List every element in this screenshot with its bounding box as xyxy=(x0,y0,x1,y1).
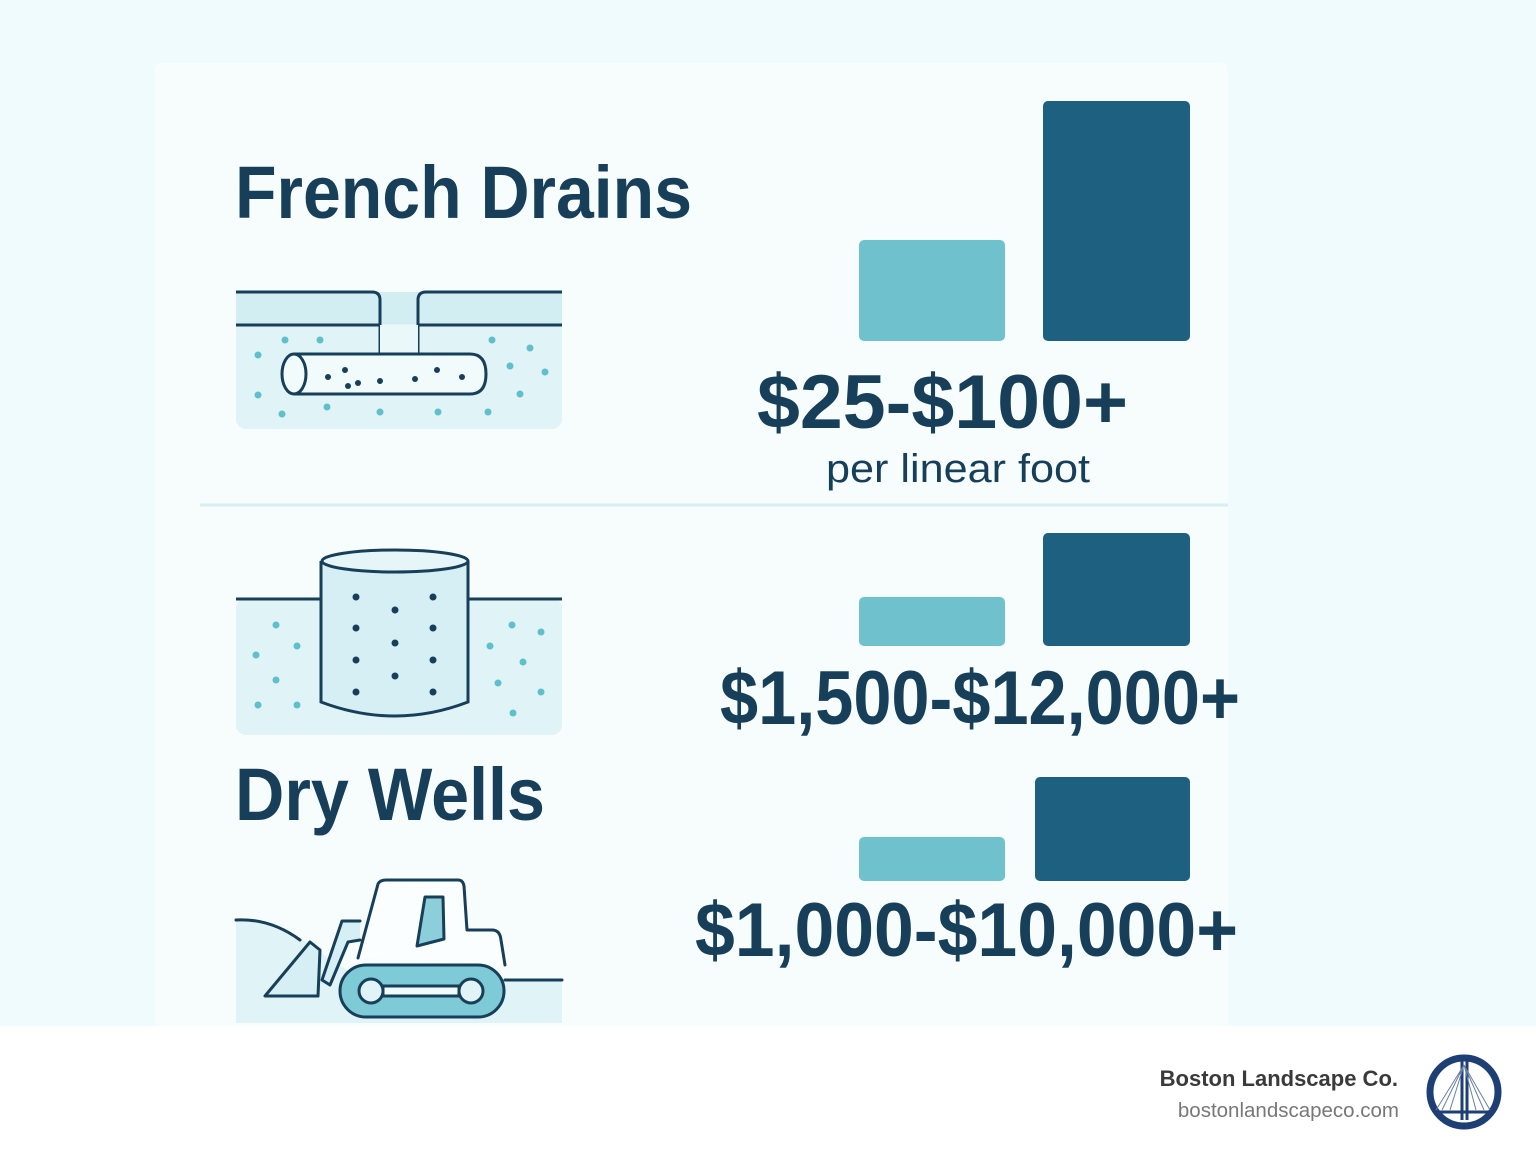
icon: logo xyxy=(1430,1058,1498,1126)
footer: url: bostonlandscapeco.com xyxy=(1178,1099,1399,1122)
bar chart: french drains xyxy=(859,101,1190,341)
icon: french drain pipe xyxy=(236,292,562,429)
price: dry wells: $1,500-$12,000+ xyxy=(720,656,1240,741)
heading: Dry Wells: Dry Wells xyxy=(235,753,545,836)
footer: brand name: Boston Landscape Co. xyxy=(1160,1066,1398,1091)
heading: French Drains: French Drains xyxy=(235,151,692,234)
icon: dry well cylinder xyxy=(236,550,562,735)
bar chart: dry wells xyxy=(859,533,1190,646)
panel: main card xyxy=(155,63,1228,1026)
price: french drains: $25-$100+ xyxy=(757,360,1128,445)
price: excavation: $1,000-$10,000+ xyxy=(695,888,1238,973)
bar chart: excavation xyxy=(859,777,1190,881)
icon: excavator xyxy=(236,880,562,1023)
label: per linear foot: per linear foot xyxy=(826,447,1090,491)
